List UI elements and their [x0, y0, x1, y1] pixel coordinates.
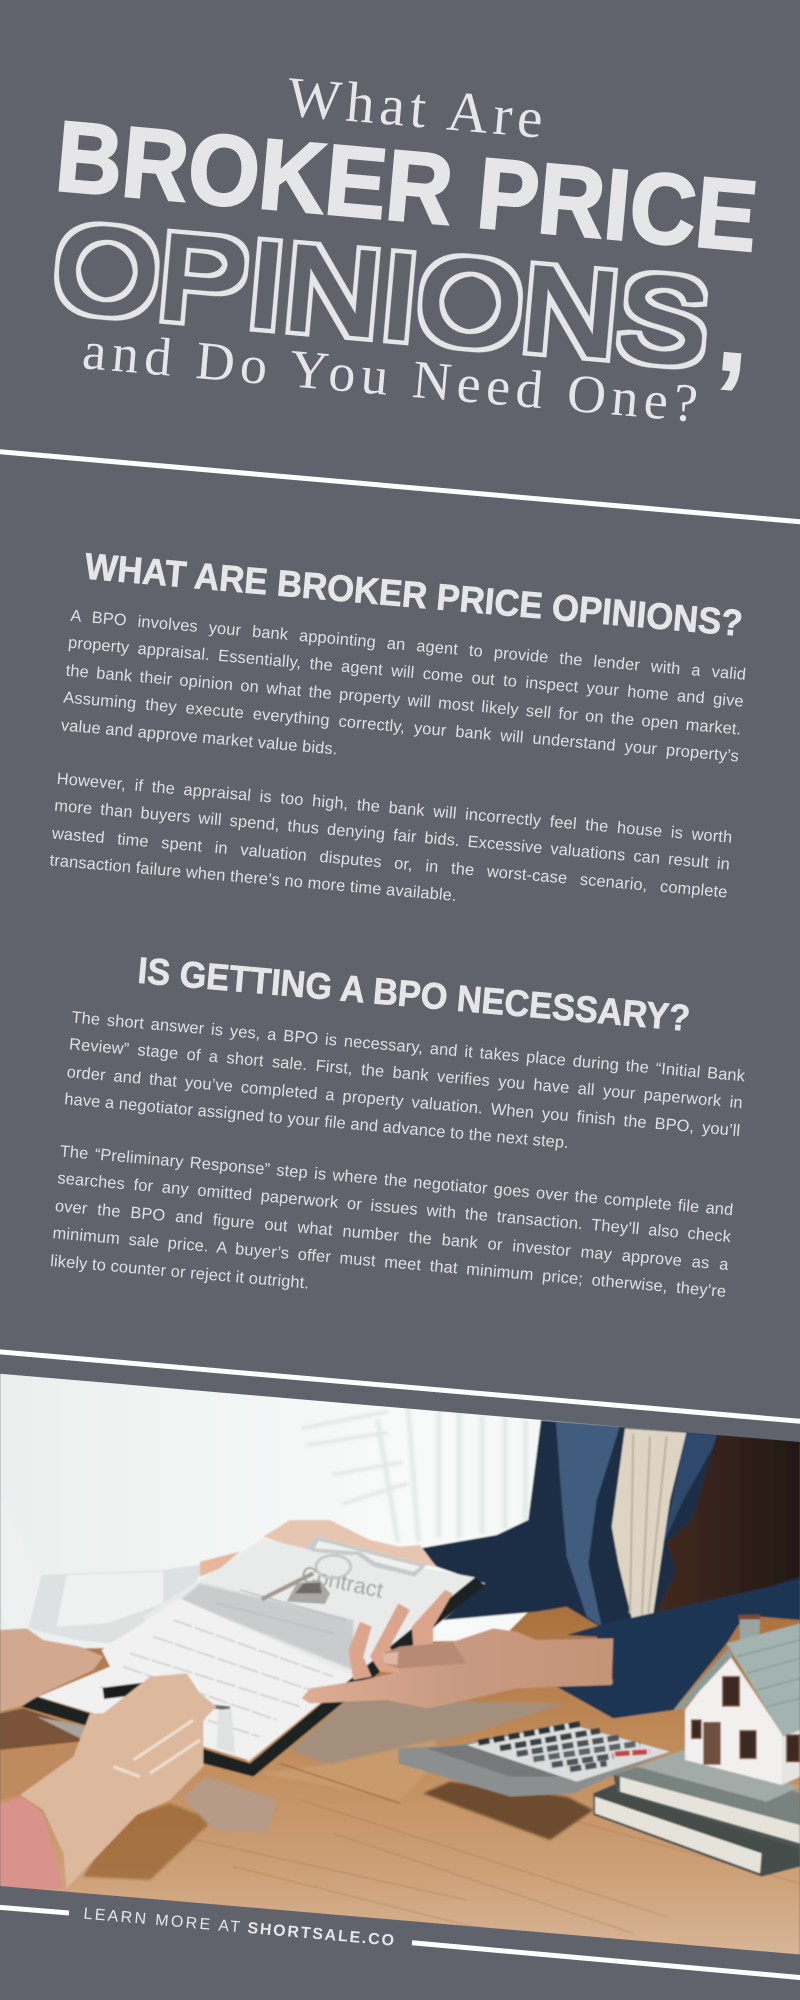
clipboard with contract: [22, 1538, 485, 1777]
text block: short answer paragraph: The short answer is yes, a BPO is necessary, and it takes place during the “Initial Bank: [71, 1008, 746, 1085]
footer rule right: [412, 1943, 800, 1978]
text block: short answer paragraph: order and that you’ve completed a property valuation. When you finish the BPO, you’ll: [66, 1063, 741, 1140]
table: [0, 1590, 800, 1960]
text block: BPO explanation paragraph: [60, 607, 747, 766]
table shadow and calculator: [398, 1723, 670, 1840]
man's right hand and sleeve: [0, 1673, 217, 1890]
title: [37, 46, 771, 438]
text block: preliminary response paragraph: The “Preliminary Response” step is where the negotiator goes over the complete file and: [59, 1142, 734, 1219]
stacked books: [592, 1766, 800, 1878]
laptop: [29, 1564, 200, 1643]
text block: BPO explanation paragraph: the bank their opinion on what the property will most likely sell for on the open market.: [65, 661, 742, 738]
text block: high appraisal paragraph: transaction failure when there’s no more time available.: [49, 852, 457, 905]
text block: BPO explanation paragraph: A BPO involves your bank appointing an agent to provide the lender with a valid: [70, 607, 747, 684]
text block: short answer paragraph: [64, 1008, 746, 1152]
text block: high appraisal paragraph: [49, 770, 733, 905]
text block: preliminary response paragraph: likely to counter or reject it outright.: [50, 1252, 310, 1292]
text block: short answer paragraph: Review” stage of a short sale. First, the bank verifies you have all your paperwork in: [68, 1036, 743, 1113]
text block: short answer paragraph: have a negotiator assigned to your file and advance to the next step.: [64, 1090, 570, 1152]
text block: preliminary response paragraph: over the BPO and figure out what number the bank or investor may approve as a: [54, 1197, 729, 1274]
text block: BPO explanation paragraph: Assuming they execute everything correctly, your bank will understand your property’s: [63, 689, 740, 766]
text block: preliminary response paragraph: minimum sale price. A buyer’s offer must meet that minimum price; otherwise, they’re: [52, 1224, 727, 1301]
website: SHORTSALE.CO: [247, 1920, 395, 1950]
text block: BPO explanation paragraph: property appraisal. Essentially, the agent will come out to inspect your home and give: [67, 634, 744, 711]
text block: preliminary response paragraph: [50, 1142, 734, 1301]
woman's hand holding clipboard: [200, 1520, 437, 1604]
title line: What Are: What Are: [285, 66, 545, 151]
heading: what are broker price opinions: WHAT ARE BROKER PRICE OPINIONS?: [83, 546, 744, 644]
curtain and palm: [301, 1407, 526, 1542]
title line: Opinions outlined: OPINIONS: [49, 200, 713, 391]
open hand gesture: [302, 1590, 613, 1708]
man's left hand: [0, 1628, 103, 1712]
photo background: [0, 1374, 721, 1650]
title comma: ,: [711, 258, 758, 400]
text block: BPO explanation paragraph: value and approve market value bids.: [60, 716, 338, 758]
worn dark wood: [0, 1700, 800, 1933]
woman: blazer, shirt and hair: [420, 1420, 800, 1718]
clipboard clip: [305, 1536, 427, 1577]
text block: high appraisal paragraph: wasted time spent in valuation disputes or, in the worst-case scenario, complete: [51, 824, 728, 901]
text block: high appraisal paragraph: However, if the appraisal is too high, the bank will incorrectly feel the house is worth: [56, 770, 733, 847]
pen: [103, 1688, 235, 1753]
heading: is getting a BPO necessary: IS GETTING A BPO NECESSARY?: [136, 950, 692, 1039]
panel: photo of contract signing: [0, 1360, 800, 1960]
contract label: Contract: [299, 1561, 385, 1603]
learn more label: LEARN MORE AT: [83, 1906, 241, 1936]
footer rule left: [0, 1907, 69, 1913]
title line: and Do You Need One?: and Do You Need One?: [80, 320, 700, 434]
text block: preliminary response paragraph: searches for any omitted paperwork or issues with the transaction. They’ll also check: [57, 1170, 732, 1247]
keys: [262, 1555, 351, 1604]
text block: high appraisal paragraph: more than buyers will spend, thus denying fair bids. Excessive valuations can result in: [54, 797, 731, 874]
house model: [637, 1614, 800, 1802]
footer link text: [83, 1906, 395, 1950]
